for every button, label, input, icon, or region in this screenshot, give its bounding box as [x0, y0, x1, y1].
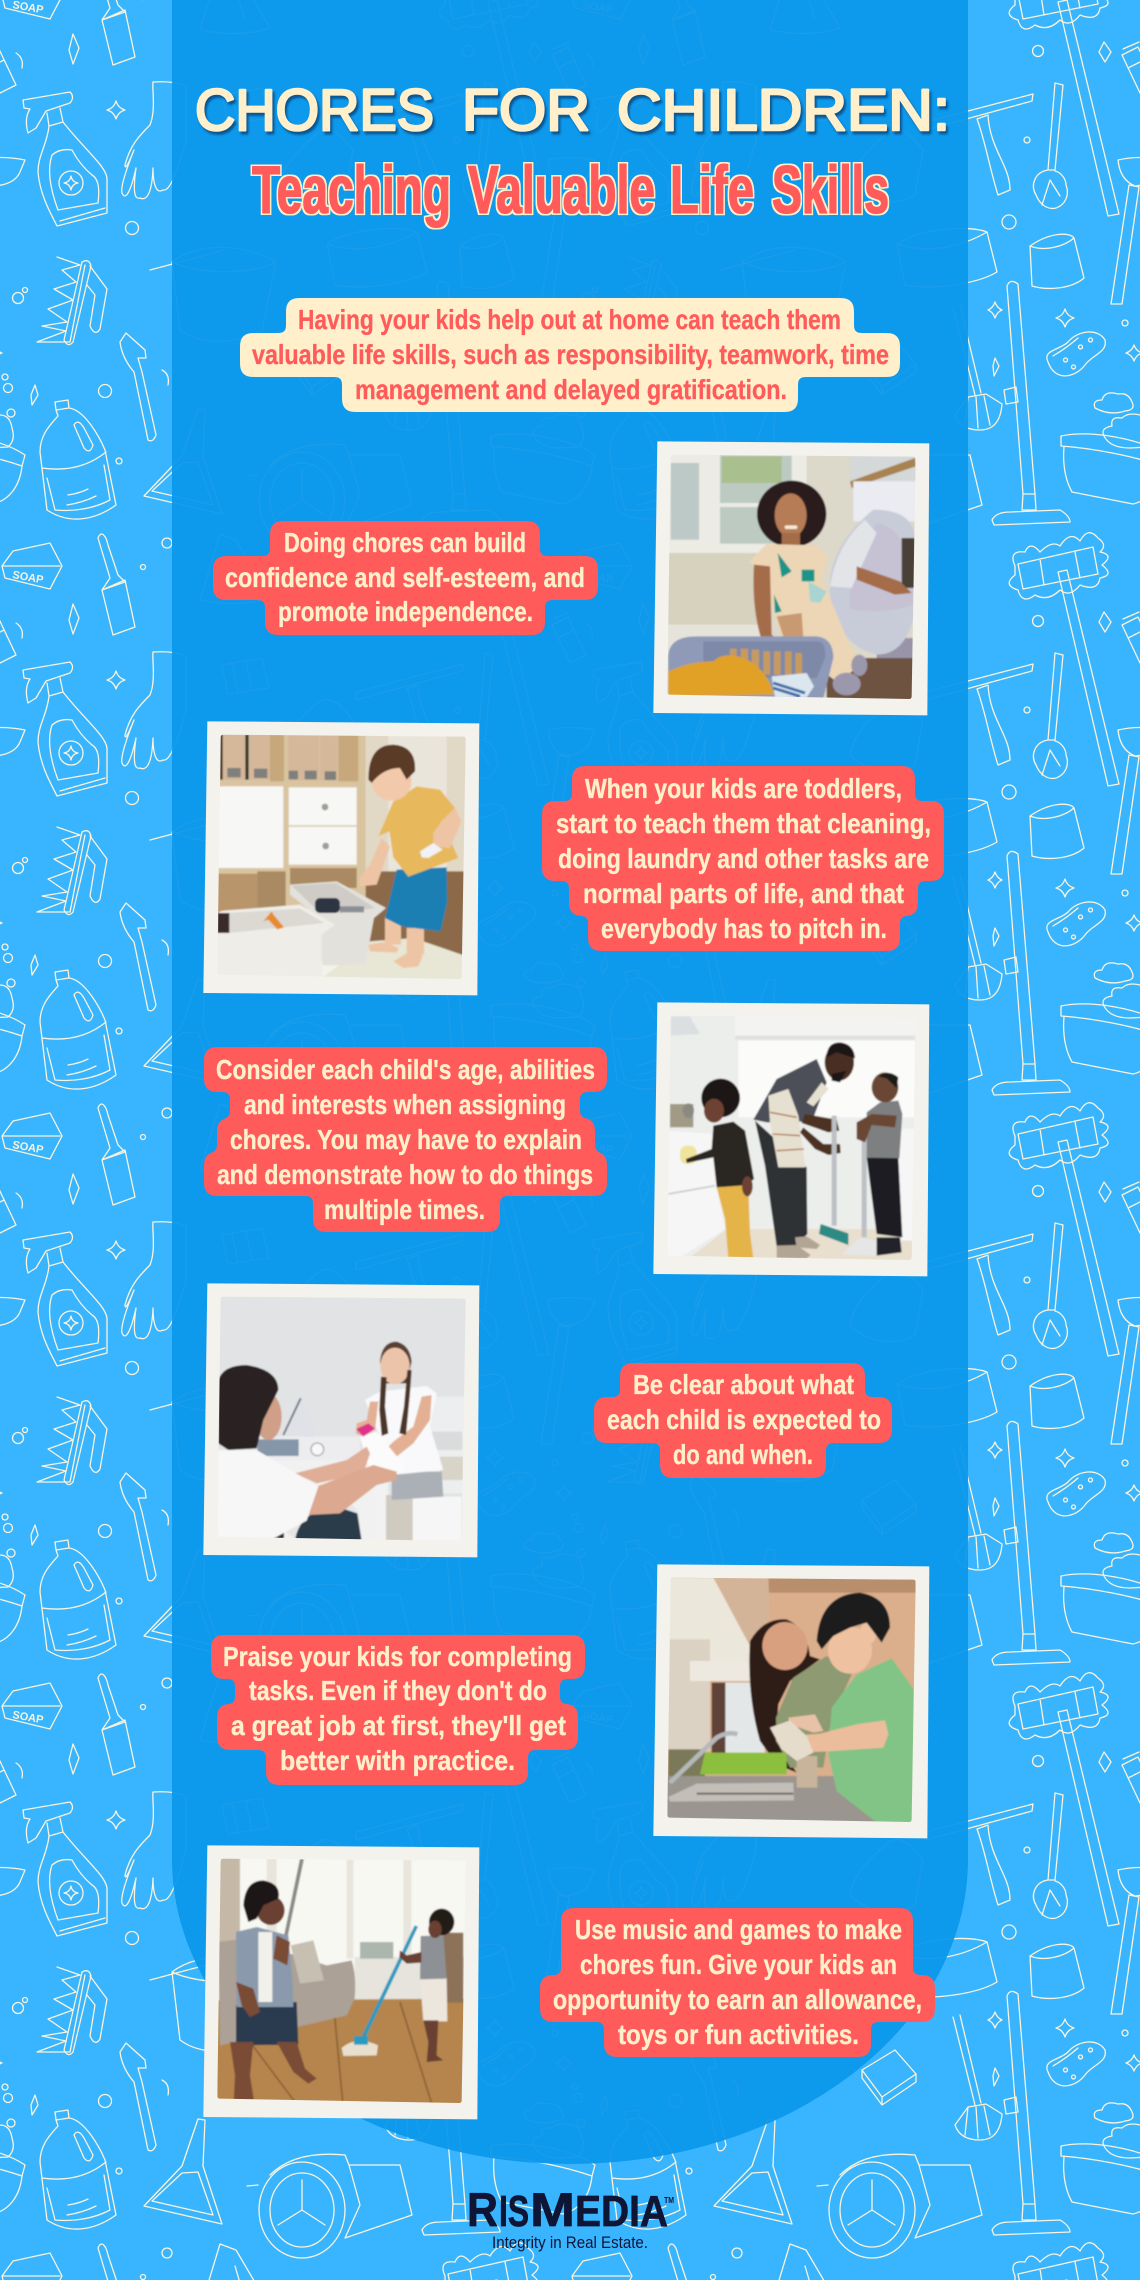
- callout: confidence: promote independence.: [278, 596, 533, 627]
- logo: RISMedia: EDIA: [575, 2187, 668, 2236]
- callout: toddlers: [542, 766, 944, 951]
- subtitle: Teaching: [252, 152, 451, 228]
- callout: age and abilities: and interests when assigning: [244, 1089, 566, 1120]
- callout: confidence: confidence and self-esteem, and: [225, 562, 585, 593]
- callout: praise: a great job at first, they'll get: [231, 1710, 566, 1741]
- callout: confidence: [213, 521, 598, 635]
- callout: age and abilities: [204, 1047, 607, 1232]
- panel: central blue arch: [172, 0, 968, 2164]
- photo: girl doing laundry: [653, 441, 929, 715]
- subtitle: Valuable: [468, 152, 655, 228]
- title: [195, 78, 950, 143]
- logo: RISMedia: R: [467, 2183, 498, 2236]
- logo: RISMedia: M: [530, 2183, 575, 2236]
- callout: be clear: do and when.: [673, 1439, 813, 1470]
- callout: praise: tasks. Even if they don't do: [249, 1675, 547, 1706]
- callout: toddlers: doing laundry and other tasks are: [558, 843, 929, 874]
- intro callout: management and delayed gratification.: [355, 374, 787, 405]
- subtitle: Skills: [772, 152, 889, 228]
- logo: RISMedia: IS: [499, 2187, 529, 2236]
- callout: praise: better with practice.: [280, 1745, 515, 1776]
- callout: toddlers: everybody has to pitch in.: [601, 913, 887, 944]
- callout: music and games: Use music and games to make: [575, 1914, 902, 1945]
- callout: age and abilities: chores. You may have to explain: [230, 1124, 582, 1155]
- callout: toddlers: start to teach them that cleaning,: [556, 808, 931, 839]
- callout: toddlers: When your kids are toddlers,: [585, 773, 902, 804]
- callout: music and games: chores fun. Give your kids an: [580, 1949, 897, 1980]
- photo: toddler tidying toys: [203, 721, 479, 995]
- intro callout: Having your kids help out at home can teach them: [298, 304, 841, 335]
- callout: toddlers: normal parts of life, and that: [583, 878, 904, 909]
- callout: confidence: Doing chores can build: [284, 527, 526, 558]
- callout: age and abilities: Consider each child's age, abilities: [216, 1054, 595, 1085]
- callout: be clear: each child is expected to: [607, 1404, 881, 1435]
- callout: age and abilities: multiple times.: [324, 1194, 485, 1225]
- callout: age and abilities: and demonstrate how to do things: [217, 1159, 593, 1190]
- callout: praise: Praise your kids for completing: [223, 1641, 572, 1672]
- subtitle: [252, 152, 889, 228]
- intro callout: valuable life skills, such as responsibility, teamwork, time: [252, 339, 889, 370]
- logo: RISMedia: Integrity in Real Estate.: [492, 2233, 648, 2252]
- photo: mother and son washing dishes: [653, 1564, 929, 1838]
- photo: children playing with mops: [203, 1845, 479, 2119]
- subtitle: Life: [670, 152, 754, 228]
- photo: mother and daughter with detergent: [203, 1283, 479, 1557]
- callout: music and games: [540, 1908, 935, 2057]
- callout: music and games: toys or fun activities.: [618, 2019, 859, 2050]
- callout: be clear: [594, 1363, 892, 1478]
- callout: music and games: opportunity to earn an allowance,: [553, 1984, 922, 2015]
- title: FOR: [462, 78, 590, 143]
- intro callout: [240, 298, 900, 412]
- callout: be clear: Be clear about what: [633, 1369, 854, 1400]
- logo: RISMedia: TM: [664, 2196, 674, 2205]
- title: CHILDREN:: [617, 78, 950, 143]
- photo: father and children cleaning: [653, 1002, 929, 1276]
- callout: praise: [211, 1635, 585, 1785]
- logo: RISMedia: [467, 2183, 674, 2252]
- title: CHORES: [195, 78, 434, 143]
